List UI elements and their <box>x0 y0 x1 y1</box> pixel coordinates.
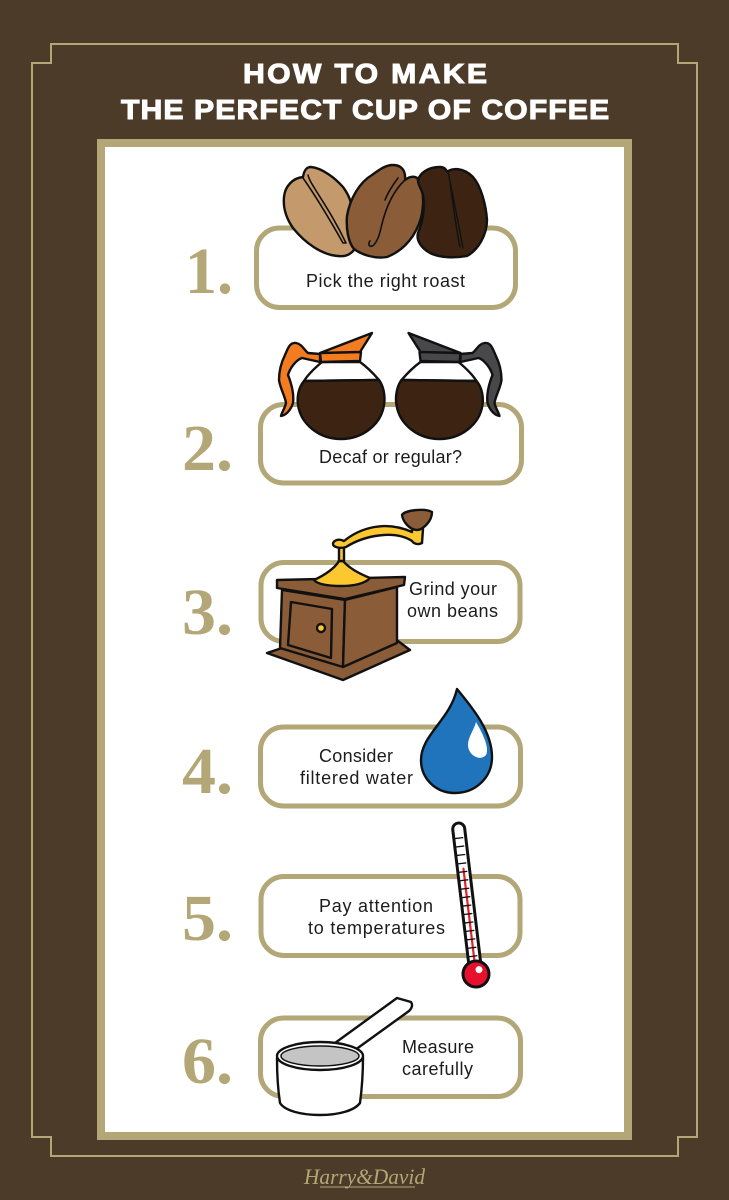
icon: measuring scoop <box>277 998 412 1115</box>
step 1: pick the right roast <box>185 165 516 308</box>
title: HOW TO MAKE <box>243 59 487 90</box>
label box 5 <box>261 876 520 956</box>
label 5 <box>308 896 445 938</box>
label 6 <box>402 1037 474 1079</box>
number 3: 3. <box>182 576 233 649</box>
label 3: own beans <box>407 601 498 621</box>
label 6: Measure <box>402 1037 474 1057</box>
label 6: carefully <box>402 1059 473 1079</box>
label box 3 <box>261 562 520 642</box>
icon: thermometer <box>445 822 490 988</box>
label 3 <box>407 579 498 621</box>
label 1: Pick the right roast <box>306 271 465 291</box>
icon: water drop <box>421 689 492 793</box>
step 3: grind your own beans <box>182 510 520 680</box>
label 5: to temperatures <box>308 918 445 938</box>
number 2: 2. <box>182 412 233 485</box>
label 4: Consider <box>319 746 393 766</box>
label box 6 <box>260 1018 520 1096</box>
icon: orange decaf carafe <box>279 333 384 439</box>
panel: white content panel <box>101 143 628 1136</box>
icon: coffee grinder <box>267 510 432 680</box>
label 3: Grind your <box>409 579 497 599</box>
logo: Harry & David: Harry&David <box>303 1164 426 1189</box>
step 4: consider filtered water <box>182 689 520 808</box>
label 2: Decaf or regular? <box>319 447 462 467</box>
label box 1 <box>256 228 516 308</box>
icon: three coffee beans <box>284 165 487 258</box>
number 4: 4. <box>182 735 233 808</box>
number 1: 1. <box>185 235 233 308</box>
label 5: Pay attention <box>319 896 433 916</box>
label box 2 <box>260 404 522 483</box>
label box 4 <box>260 727 520 806</box>
step 2: decaf or regular <box>182 333 522 485</box>
title: THE PERFECT CUP OF COFFEE <box>121 95 609 126</box>
step 6: measure carefully <box>182 998 520 1115</box>
icon: black regular carafe <box>396 333 502 439</box>
title <box>121 59 609 126</box>
label 4: filtered water <box>300 768 413 788</box>
step 5: pay attention to temperatures <box>182 822 520 988</box>
number 5: 5. <box>182 882 233 955</box>
label 4 <box>300 746 413 788</box>
number 6: 6. <box>182 1025 233 1098</box>
